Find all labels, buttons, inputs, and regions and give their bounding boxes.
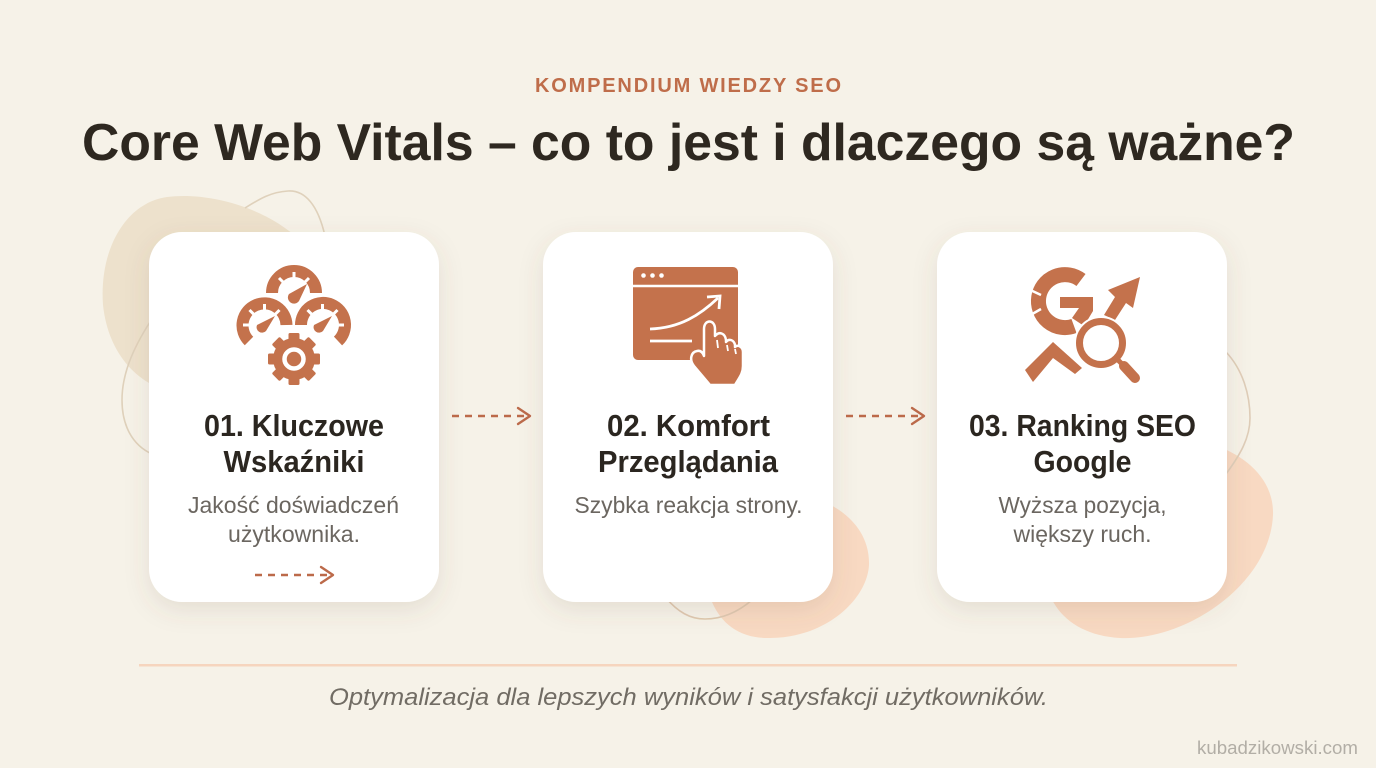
footer tagline: Optymalizacja dla lepszych wyników i satysfakcji użytkowników. <box>329 684 1048 711</box>
card 3 description <box>998 492 1166 547</box>
decorative outline: top left <box>122 191 325 454</box>
watermark: kubadzikowski.com <box>1197 738 1358 758</box>
panel: card 1 <box>149 232 439 602</box>
title: Core Web Vitals – co to jest i dlaczego są ważne? <box>82 114 1295 172</box>
decorative blob: beige top left <box>103 196 300 395</box>
card 1 heading <box>204 408 384 479</box>
card 2 description: Szybka reakcja strony. <box>574 492 802 518</box>
card 1 description: użytkownika. <box>228 521 360 547</box>
arrow: card 2 to card 3 <box>846 408 924 424</box>
card 2 heading <box>598 408 779 479</box>
card 3 description: Wyższa pozycja, <box>998 492 1166 518</box>
icon: gauges and gear <box>243 271 345 385</box>
panel: card 3 <box>937 232 1227 602</box>
panel: card 2 <box>543 232 833 602</box>
decorative blob: peach under card 2 <box>708 500 869 638</box>
card 2 heading: Przeglądania <box>598 444 779 479</box>
icon: Google G, arrow and magnifier <box>1025 275 1140 382</box>
card 1 description: Jakość doświadczeń <box>188 492 399 518</box>
card 1 heading: Wskaźniki <box>224 444 364 479</box>
card 2 heading: 02. Komfort <box>607 408 770 443</box>
card 3 heading: Google <box>1034 444 1132 479</box>
arrow: inside card 1 <box>255 567 333 583</box>
decorative outline: under card 2 <box>666 598 752 619</box>
card 3 heading: 03. Ranking SEO <box>969 408 1196 443</box>
card 3 heading <box>969 408 1196 479</box>
card 1 description <box>188 492 399 547</box>
arrow: card 1 to card 2 <box>452 408 530 424</box>
eyebrow heading: KOMPENDIUM WIEDZY SEO <box>535 75 841 97</box>
card 3 description: większy ruch. <box>1013 521 1152 547</box>
decorative outline: right of card 3 <box>1226 352 1250 474</box>
icon: browser chart with hand <box>633 267 743 385</box>
card 1 heading: 01. Kluczowe <box>204 408 384 443</box>
decorative blob: peach under card 3 <box>1050 445 1273 638</box>
